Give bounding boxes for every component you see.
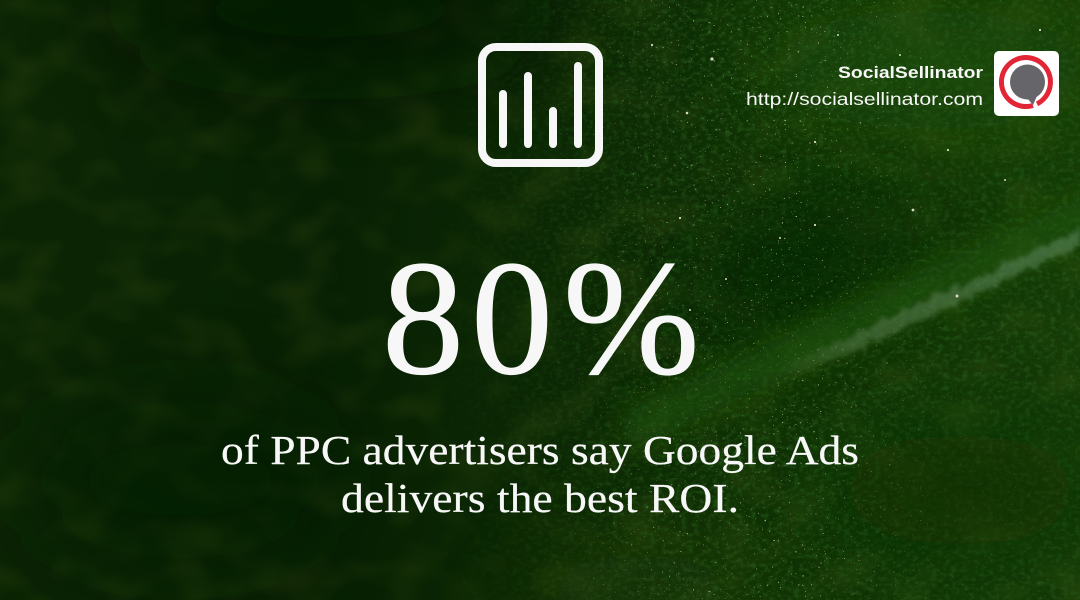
description text: delivers the best ROI.	[341, 475, 739, 521]
brand block	[746, 51, 1059, 116]
leaf vein ridge	[640, 210, 1080, 425]
headline statistic: 80%	[382, 228, 700, 409]
icon: SocialSellinator logo	[994, 51, 1059, 116]
brand URL: http://socialsellinator.com	[746, 89, 983, 109]
description text: of PPC advertisers say Google Ads	[221, 427, 859, 473]
icon: bar chart in rounded square	[482, 47, 599, 163]
description text	[221, 427, 859, 521]
brand name: SocialSellinator	[838, 63, 983, 82]
bright specks	[651, 29, 1041, 311]
